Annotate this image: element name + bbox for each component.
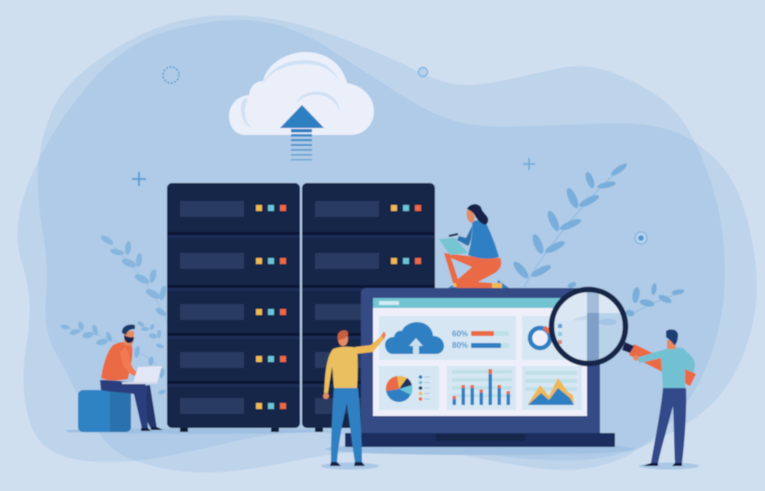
server rack right (302, 183, 435, 432)
lens (552, 290, 624, 362)
neck and head (667, 340, 676, 350)
decorative plus right (523, 158, 535, 170)
beard (124, 335, 134, 343)
front leg (100, 380, 148, 429)
ground shadow left (67, 429, 330, 434)
cloud upload icon (229, 52, 374, 160)
server rack left (167, 183, 300, 432)
shoes (643, 463, 682, 466)
blue torso (468, 220, 499, 259)
screen header (373, 298, 587, 308)
handle tip over torso (685, 369, 696, 386)
decorative plus left (132, 172, 146, 186)
laptop notch (436, 434, 525, 441)
panel: area chart (522, 366, 582, 410)
decorative target dot (635, 232, 647, 244)
small cloud icon (385, 322, 444, 354)
yellow torso (324, 347, 358, 393)
man pointing at screen (323, 330, 386, 466)
ground shadow person right (639, 462, 699, 470)
clipboard (439, 238, 468, 255)
back leg (131, 385, 157, 429)
handle collar (622, 342, 634, 353)
upload arrow stripes (291, 129, 312, 160)
orange legs (444, 253, 501, 288)
upload arrow head (280, 105, 324, 128)
blue trousers (331, 388, 362, 463)
laptop dashboard (345, 288, 615, 447)
face (467, 209, 474, 223)
plant right of magnifier (567, 281, 685, 325)
hand (633, 355, 639, 361)
hair (122, 324, 135, 335)
panel: pie chart (379, 366, 439, 410)
panel: donut chart (522, 316, 582, 360)
panel: cloud progress (379, 316, 516, 360)
panel: bar chart (447, 366, 516, 410)
screen (373, 298, 587, 416)
orange handle behind arm (629, 344, 696, 386)
plant right of woman (511, 162, 629, 287)
shoes (448, 280, 509, 288)
shoes (330, 462, 365, 466)
arm (457, 226, 472, 246)
hand (323, 393, 329, 399)
decorative small circle (418, 68, 428, 76)
laptop (133, 366, 162, 383)
person sitting with laptop (78, 324, 163, 432)
teal torso (636, 347, 695, 390)
cloud (229, 52, 374, 135)
plant left lower (60, 320, 166, 395)
head (338, 332, 348, 346)
hair (467, 204, 488, 225)
laptop lid (361, 288, 600, 434)
lens ring (552, 290, 626, 364)
decorative dashed circle (163, 67, 179, 83)
arm (120, 347, 137, 376)
navy trousers (651, 388, 686, 463)
80 percent label: 80% (452, 341, 468, 350)
60 percent label: 60% (452, 330, 468, 338)
ground shadow person center (321, 462, 379, 470)
magnifying glass (552, 285, 634, 365)
plant left upper (99, 234, 168, 325)
torso (101, 342, 132, 380)
laptop base (345, 433, 615, 447)
arm raised (355, 335, 385, 354)
shoes (141, 427, 163, 431)
neck and face (124, 331, 134, 346)
woman kneeling on laptop (439, 204, 509, 288)
cube seat (78, 390, 131, 432)
hair (666, 329, 678, 345)
ground shadow laptop (325, 443, 635, 455)
pen (449, 234, 458, 236)
man with magnifying glass (629, 329, 696, 466)
